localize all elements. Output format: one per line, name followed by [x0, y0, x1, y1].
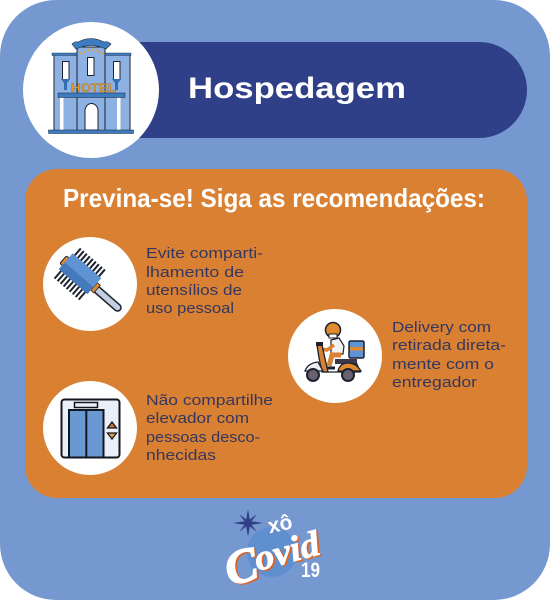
title banner	[90, 42, 527, 138]
logo: Xô Covid 19: C	[221, 538, 266, 597]
logo: Xô Covid 19: C	[219, 537, 265, 596]
text: elevator: nhecidas	[146, 448, 216, 464]
icon: hotel	[23, 22, 159, 158]
text: personal items: lhamento de	[146, 265, 244, 281]
scooter body	[335, 359, 357, 364]
text: delivery: mente com o	[392, 357, 494, 373]
text: elevator: pessoas desco-	[146, 430, 260, 446]
logo: Xô Covid 19: 19	[301, 559, 320, 582]
icon: delivery scooter	[288, 309, 382, 403]
title: Hospedagem	[188, 72, 406, 105]
text: delivery: entregador	[392, 375, 477, 391]
hotel sign: HOTEL	[71, 81, 116, 95]
panel heading: Previna-se! Siga as recomendações:	[63, 183, 485, 213]
text: delivery: retirada direta-	[392, 338, 506, 354]
icon: elevator	[43, 381, 137, 475]
text: delivery: Delivery com	[392, 320, 491, 336]
box	[349, 341, 364, 358]
text: elevator: Não compartilhe	[146, 393, 273, 409]
rider	[331, 338, 344, 354]
text: personal items: utensílios de	[146, 283, 242, 299]
icon: hairbrush	[43, 237, 137, 331]
logo: Xô Covid 19: ovid	[251, 524, 327, 580]
panel: recommendations	[25, 169, 527, 498]
text: personal items: uso pessoal	[146, 301, 234, 317]
logo: Xô Covid 19: xô	[266, 511, 295, 538]
text: personal items: Evite comparti-	[146, 246, 263, 262]
text: elevator: elevador com	[146, 411, 249, 427]
logo: Xô Covid 19: ovid	[250, 523, 325, 579]
logo: Xô Covid 19	[219, 509, 329, 598]
